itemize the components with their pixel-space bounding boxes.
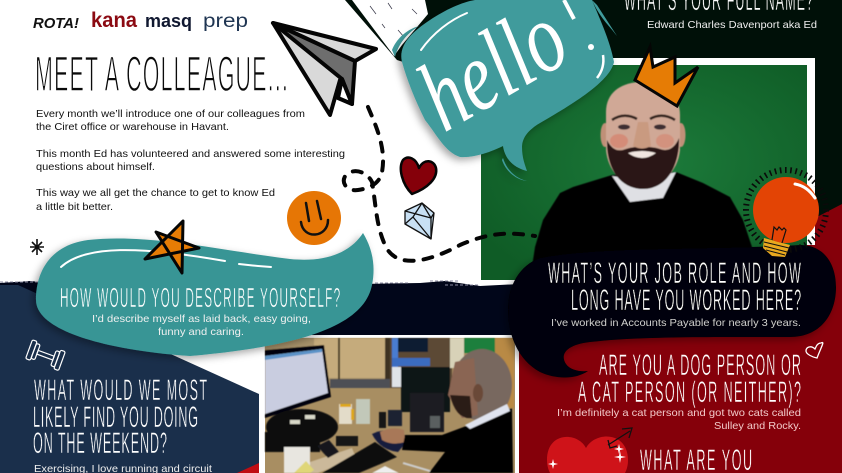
panel: weekend question <box>0 285 265 473</box>
icon: dumbbell <box>26 340 65 371</box>
intro text: Every month we’ll introduce one of our colleagues from <box>36 108 305 120</box>
heading: job role: LONG HAVE YOU WORKED HERE? <box>571 283 801 317</box>
icon: red heart with arrow <box>547 428 632 473</box>
white column between photo and red panel <box>515 338 519 473</box>
heading: dog or cat: A CAT PERSON (OR NEITHER)? <box>578 375 801 409</box>
answer: describe yourself: funny and caring. <box>158 326 244 338</box>
panel: dark red background <box>519 204 842 473</box>
arrow: dashed flight path <box>344 107 535 261</box>
intro text: This way we all get the chance to get to know Ed <box>36 187 275 199</box>
answer: job role: I’ve worked in Accounts Payable for nearly 3 years. <box>551 317 801 329</box>
heading: dog or cat: ARE YOU A DOG PERSON OR <box>599 348 801 382</box>
answer: describe yourself: I’d describe myself as laid back, easy going, <box>92 313 311 325</box>
intro text: questions about himself. <box>36 161 155 173</box>
answer: dog or cat: Sulley and Rocky. <box>714 420 801 432</box>
icon: orange crown <box>635 47 698 106</box>
logos <box>33 9 248 32</box>
icon: smiley <box>287 191 341 245</box>
weekend heading <box>33 373 207 460</box>
heading: dog or cat <box>578 348 801 409</box>
icon: paper plane <box>273 23 376 115</box>
answer: full name: Edward Charles Davenport aka Ed <box>647 19 817 31</box>
heading: describe yourself: HOW WOULD YOU DESCRIBE YOURSELF? <box>60 282 340 314</box>
weekend heading: WHAT WOULD WE MOST <box>34 373 207 407</box>
callout: job role black bubble <box>508 245 836 378</box>
logo: masq: masq <box>145 11 192 31</box>
panel: dark green name background <box>345 0 842 250</box>
icon: light bulb <box>746 170 826 257</box>
heading: job role: WHAT’S YOUR JOB ROLE AND HOW <box>548 256 801 290</box>
intro text <box>36 108 345 213</box>
icon: dark red heart <box>401 158 436 194</box>
logo: kana: kana <box>91 9 137 32</box>
weekend heading: LIKELY FIND YOU DOING <box>33 400 198 434</box>
title: MEET A COLLEAGUE... <box>35 47 288 103</box>
logo: prep: prep <box>203 11 248 32</box>
answer: dog or cat <box>557 407 801 432</box>
icon: diamond <box>405 203 434 239</box>
icon: small outline heart <box>806 343 823 358</box>
portrait of Ed <box>530 82 756 280</box>
photo: Ed at his desk <box>265 338 515 473</box>
icon: star <box>145 221 199 273</box>
weekend heading: ON THE WEEKEND? <box>33 426 167 460</box>
answer: dog or cat: I’m definitely a cat person and got two cats called <box>557 407 801 419</box>
intro text: a little bit better. <box>36 201 113 213</box>
callout: hello speech bubble <box>400 0 617 181</box>
callout: how would you describe yourself <box>36 233 374 356</box>
answer: describe yourself <box>92 313 311 338</box>
logo: ROTA: ROTA! <box>33 15 79 32</box>
panel: navy band with brush edge <box>0 281 520 338</box>
brush texture on the top edge <box>352 0 428 57</box>
intro text: This month Ed has volunteered and answered some interesting <box>36 148 345 160</box>
photo: portrait frame <box>481 58 815 280</box>
intro text: the Ciret office or warehouse in Havant. <box>36 121 229 133</box>
icon: asterisk <box>30 239 44 255</box>
heading: job role <box>548 256 801 317</box>
